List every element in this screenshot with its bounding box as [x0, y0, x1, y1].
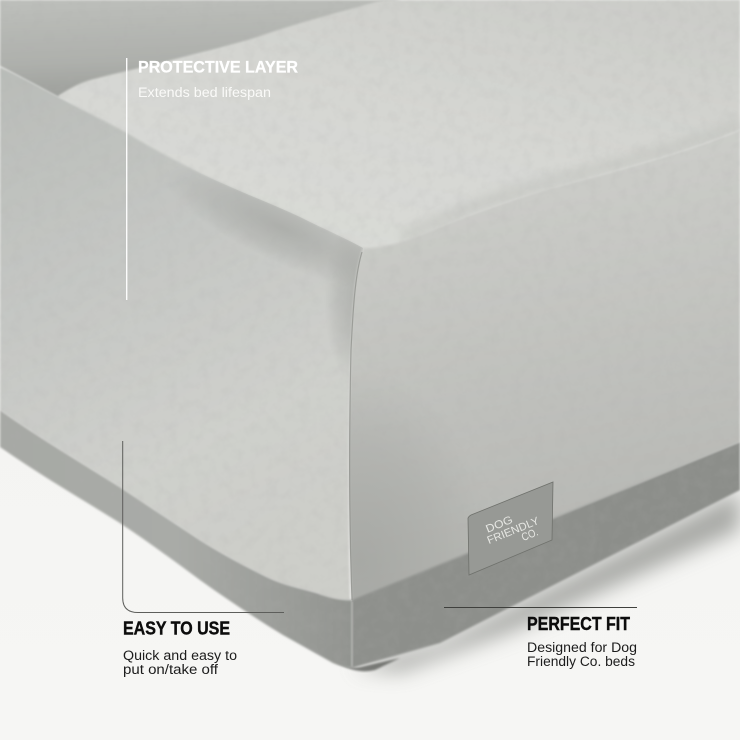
callout: perfect fit: Friendly Co. beds	[527, 654, 635, 669]
left bolster	[0, 67, 363, 600]
leader line	[126, 58, 127, 300]
brand tag	[468, 482, 553, 575]
description: Designed for Dog	[527, 640, 637, 655]
left bolster shoulder shading	[197, 180, 363, 363]
callout: easy to use: put on/take off	[123, 662, 218, 677]
floor shadow	[352, 490, 740, 672]
left trim band	[0, 410, 352, 668]
floor contact shadow	[335, 658, 400, 671]
cushion edge shading along right bolster	[400, 118, 740, 242]
right bolster	[349, 130, 740, 602]
description: Extends bed lifespan	[138, 85, 271, 100]
right bolster lower shading	[349, 426, 438, 602]
back bolster	[0, 0, 400, 97]
leader line	[123, 441, 284, 612]
description: Quick and easy to	[123, 648, 237, 663]
callout: perfect fit	[444, 607, 637, 669]
heading: EASY TO USE	[123, 618, 230, 638]
tag text: FRIENDLY	[486, 515, 542, 547]
heading: PERFECT FIT	[527, 614, 630, 634]
corner seam	[350, 252, 362, 600]
tag text	[481, 505, 545, 556]
leader line	[444, 607, 637, 608]
cushion	[58, 0, 740, 250]
right trim band	[352, 442, 740, 668]
tag text: CO.	[520, 526, 540, 544]
callout: easy to use	[123, 441, 284, 677]
callout: protective layer	[126, 58, 298, 300]
tag text: DOG	[484, 514, 515, 536]
heading: PROTECTIVE LAYER	[138, 58, 298, 76]
